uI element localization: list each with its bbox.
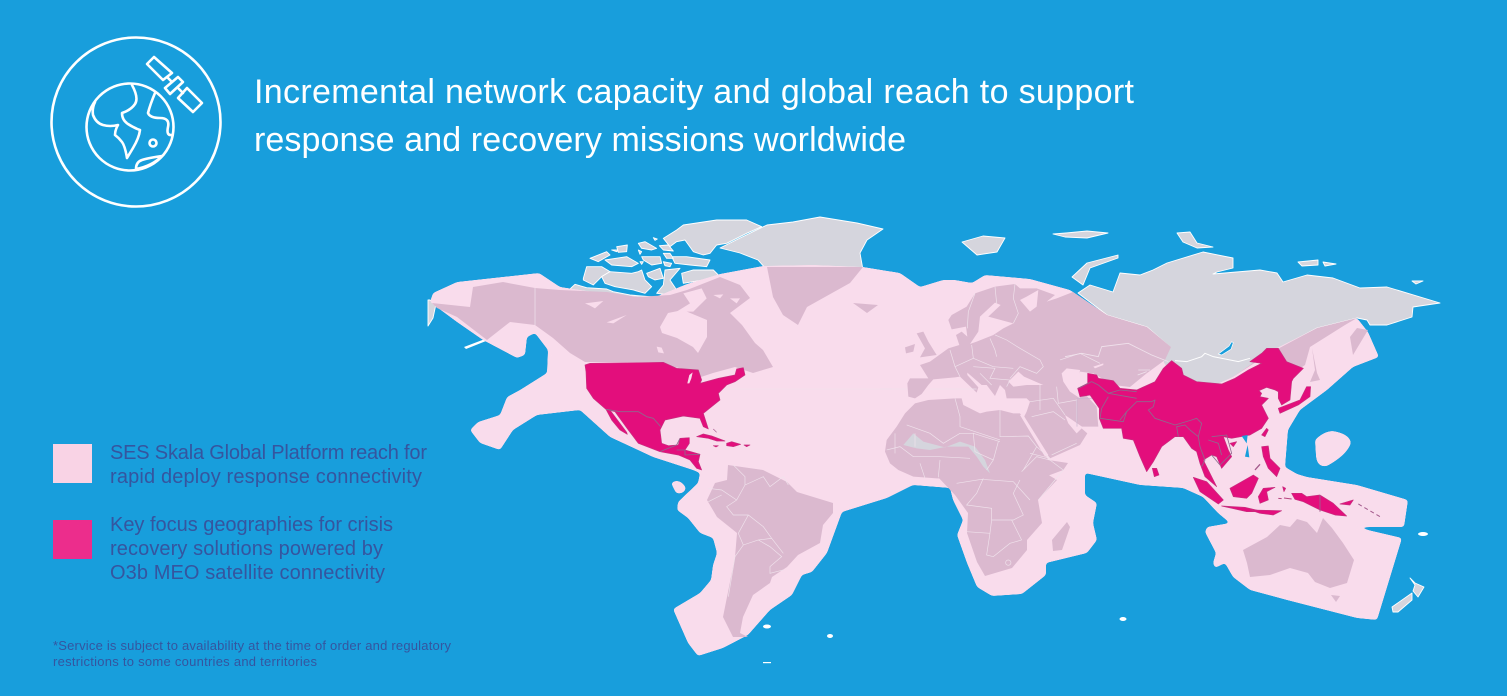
legend: key focus text: O3b MEO satellite connectivity: [110, 562, 385, 584]
map: seas and lakes in coverage: [585, 288, 1103, 457]
map: magenta north america: [585, 362, 750, 470]
map: sahel grey patch: [903, 433, 990, 473]
map: country borders: [535, 284, 1168, 597]
legend: skala platform text: SES Skala Global Platform reach for: [110, 442, 427, 464]
map: mongolia border and lake baikal: [1175, 342, 1250, 362]
legend: key focus swatch: [53, 520, 92, 559]
map: grey land outside coverage: [428, 217, 1440, 612]
map: dusky land inside coverage: [432, 267, 1368, 637]
legend: key focus text: recovery solutions powered by: [110, 538, 383, 560]
title: Incremental network capacity and global reach to support: [254, 73, 1135, 111]
map: magenta southeast asian islands: [1193, 446, 1380, 517]
legend: skala platform swatch: [53, 444, 92, 483]
legend: key focus text: Key focus geographies for crisis: [110, 514, 393, 536]
footnote: restrictions to some countries and territories: [53, 654, 318, 669]
legend: skala platform text: rapid deploy response connectivity: [110, 466, 422, 488]
title: response and recovery missions worldwide: [254, 121, 906, 159]
footnote: [53, 638, 452, 669]
map: white small islands: [464, 339, 1428, 663]
footnote: *Service is subject to availability at the time of order and regulatory: [53, 638, 452, 653]
map: blue slivers in South China Sea: [1242, 435, 1249, 457]
legend: key focus text: [110, 514, 393, 584]
map: coverage footprint: [430, 265, 1408, 656]
map: magenta japan: [1278, 387, 1311, 413]
legend: skala platform text: [110, 442, 427, 488]
map: magenta asia: [1078, 348, 1303, 487]
title: [254, 73, 1135, 159]
icon: globe and satellite: [52, 38, 220, 206]
